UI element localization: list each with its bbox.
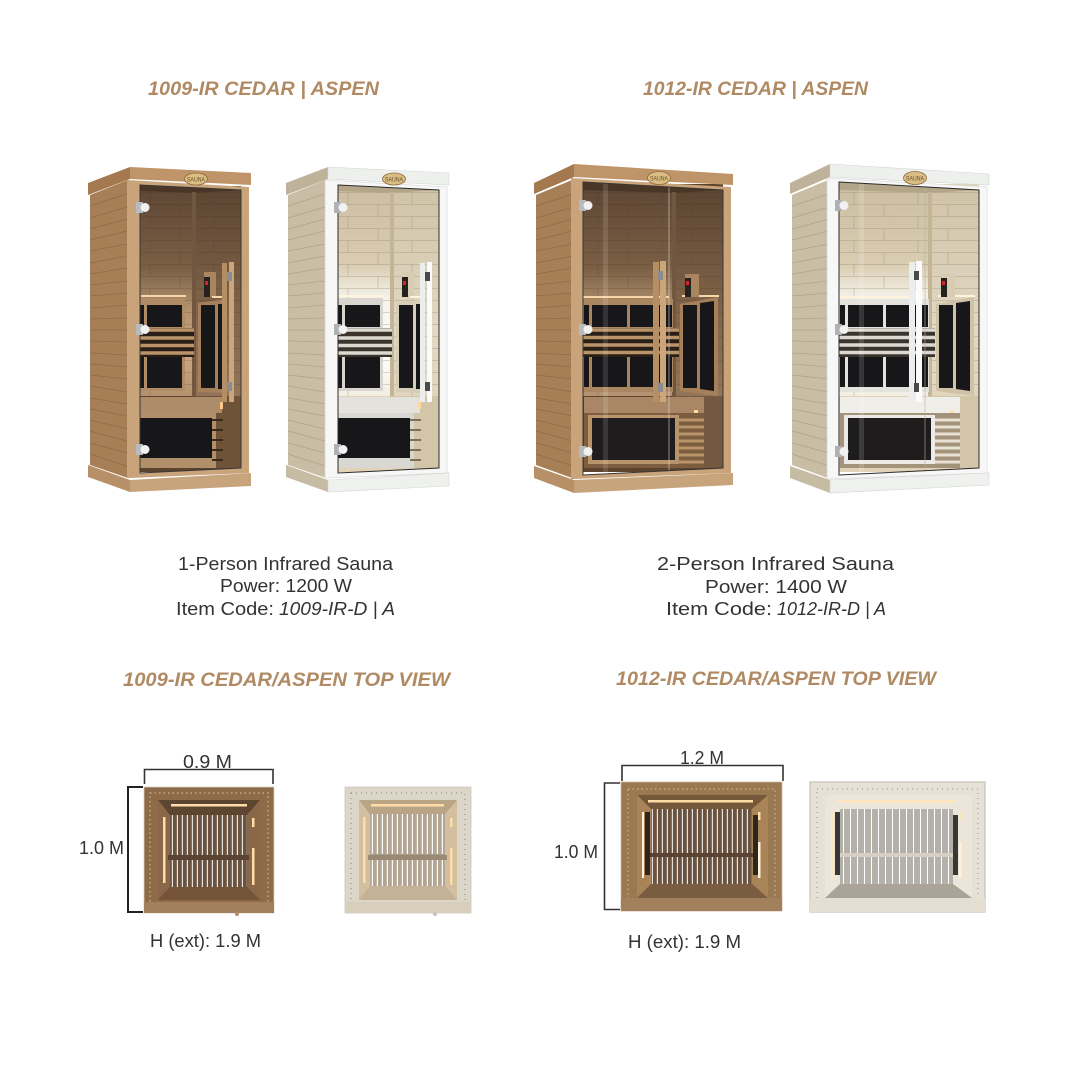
glass outline	[338, 185, 439, 473]
text block: 1009-IR specs: Item Code:	[176, 599, 274, 619]
interior	[140, 185, 241, 472]
text block: 1012-IR specs: Item Code:	[666, 599, 772, 619]
front frame	[571, 178, 731, 479]
text block: 1012-IR specs	[657, 554, 895, 619]
text block: 1012-IR specs: 2-Person Infrared Sauna	[657, 554, 895, 574]
side wall	[536, 180, 573, 478]
lower panel and slats	[840, 410, 960, 468]
back wall infrared panels and rails	[839, 299, 935, 392]
bench	[140, 397, 222, 413]
bench	[338, 397, 420, 413]
logo badge: SAUNA	[650, 176, 668, 182]
bench	[584, 397, 704, 413]
glass door handle	[420, 262, 432, 402]
glass outline	[839, 182, 979, 475]
text block: 1012-IR specs: 1012-IR-D | A	[777, 599, 886, 619]
logo badge: SAUNA	[187, 178, 205, 184]
text block: 1012-IR specs: Power: 1400 W	[705, 577, 847, 597]
lower panel and slats	[584, 410, 704, 468]
base	[286, 465, 449, 492]
interior	[338, 185, 439, 472]
logo badge: SAUNA	[906, 176, 924, 182]
logo badge	[904, 172, 926, 184]
top view image	[144, 787, 274, 916]
top cap	[88, 167, 251, 195]
text block: 1009-IR specs: Power: 1200 W	[220, 576, 352, 596]
front frame	[127, 180, 249, 478]
height note: H (ext): 1.9 M	[150, 931, 261, 951]
logo badge	[648, 172, 670, 184]
top view: 1009-IR cedar with dimensions	[79, 752, 274, 951]
logo badge	[382, 173, 406, 185]
hinges	[579, 200, 592, 457]
side wall	[792, 180, 829, 478]
lower panel	[140, 402, 223, 468]
glass seam and reflection	[859, 183, 925, 473]
hinges	[835, 200, 848, 457]
right wall panel and control	[396, 272, 425, 393]
glass door handle	[222, 262, 234, 402]
back wall infrared panels and rails	[338, 298, 392, 391]
lower panel	[338, 402, 421, 468]
sauna: 1009-IR aspen	[286, 167, 449, 492]
right wall panel and control	[198, 272, 227, 393]
base	[790, 466, 989, 493]
width dimension: 1.2 M	[680, 748, 724, 768]
right wall panel and control	[936, 274, 974, 396]
right wall panel and control	[680, 274, 718, 396]
base	[534, 466, 733, 493]
top cap	[534, 164, 733, 194]
text block: 1009-IR specs: 1-Person Infrared Sauna	[178, 554, 394, 574]
glass door handle	[653, 261, 666, 402]
text block: 1009-IR specs: 1009-IR-D | A	[279, 599, 395, 619]
front frame	[827, 178, 987, 479]
depth dimension	[554, 783, 620, 910]
side wall	[288, 180, 326, 478]
base	[88, 465, 251, 492]
side wall	[90, 180, 128, 478]
width dimension	[144, 752, 273, 784]
glass outline	[583, 182, 723, 475]
depth dimension: 1.0 M	[554, 842, 598, 862]
top view: 1012-IR aspen	[810, 782, 985, 912]
logo badge: SAUNA	[385, 178, 403, 184]
sauna: 1009-IR cedar	[88, 167, 251, 492]
top cap	[286, 167, 449, 195]
glass outline	[140, 185, 241, 473]
hinges	[334, 202, 348, 455]
top cap	[790, 164, 989, 194]
interior	[583, 182, 723, 472]
interior	[839, 182, 979, 472]
depth dimension	[79, 787, 143, 912]
bench	[840, 397, 960, 413]
heading: 1009-IR top view: 1009-IR CEDAR/ASPEN TOP VIEW	[123, 670, 452, 691]
top view: 1009-IR aspen	[345, 787, 471, 916]
height note: H (ext): 1.9 M	[628, 932, 741, 952]
top view: 1012-IR cedar with dimensions	[554, 748, 783, 952]
heading: 1012-IR top view: 1012-IR CEDAR/ASPEN TOP VIEW	[616, 669, 938, 690]
title: 1009-IR: 1009-IR CEDAR | ASPEN	[148, 79, 380, 100]
glass seam and reflection	[603, 183, 669, 473]
width dimension: 0.9 M	[183, 752, 232, 772]
sauna: 1012-IR aspen	[790, 164, 989, 493]
title: 1012-IR: 1012-IR CEDAR | ASPEN	[643, 79, 869, 100]
back wall infrared panels and rails	[583, 299, 679, 392]
width dimension	[622, 748, 783, 781]
depth dimension: 1.0 M	[79, 838, 124, 858]
top view image	[621, 782, 782, 911]
text block: 1009-IR specs	[176, 554, 395, 619]
logo badge	[184, 173, 208, 185]
sauna: 1012-IR cedar	[534, 164, 733, 493]
hinges	[136, 202, 150, 455]
back wall infrared panels and rails	[140, 298, 194, 391]
front frame	[325, 180, 447, 478]
glass door handle	[909, 261, 922, 402]
